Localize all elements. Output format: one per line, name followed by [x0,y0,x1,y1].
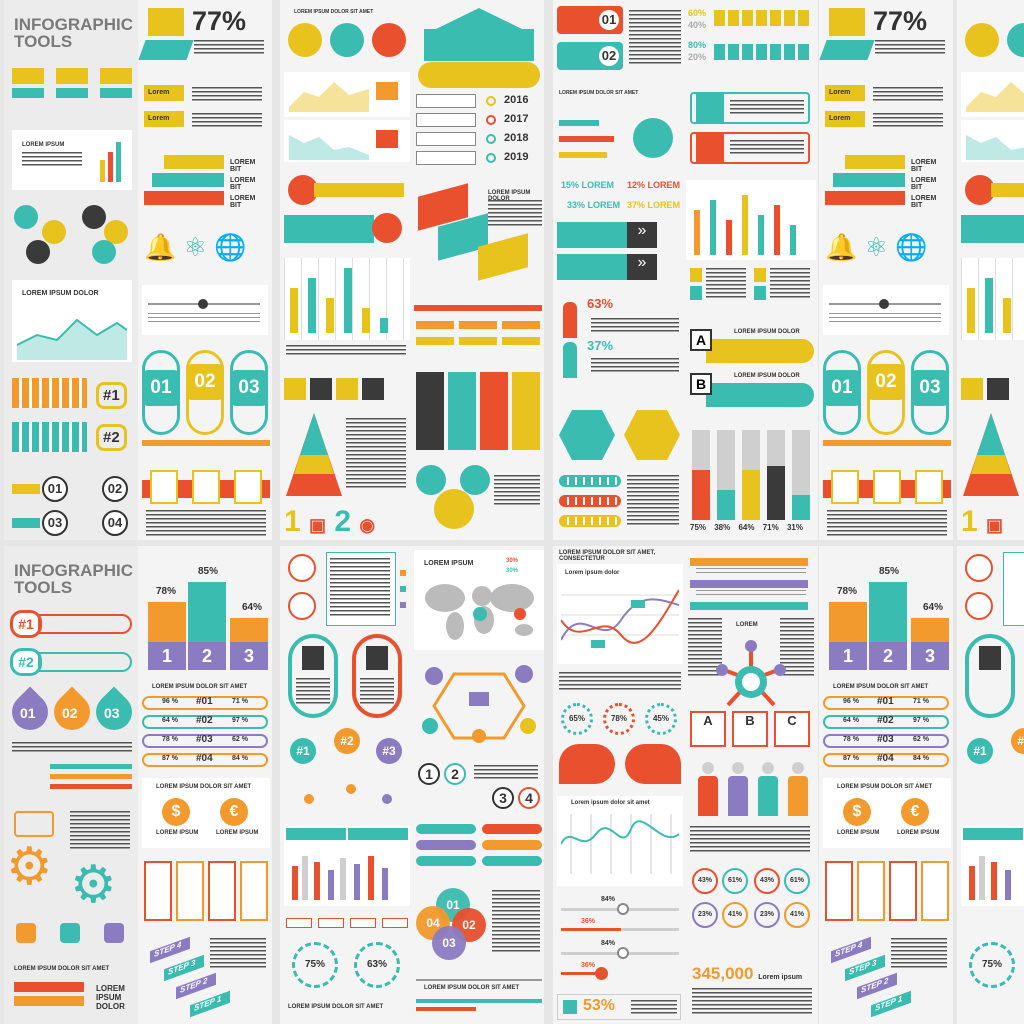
column 7 bottom (repeat of col 2 bottom): 62 % [913,736,929,743]
yellow tags [12,68,132,98]
column 5 top [553,0,687,540]
pct circles: 78% [611,714,627,723]
lorem ipsum heading: LOREM IPSUM DOLOR SIT AMET [152,684,247,690]
red circle and yellow bar [284,175,404,243]
hexagons [559,410,680,460]
#1 #2 labels [10,610,132,676]
#1 #2 #3 nodes [284,728,410,808]
percent circles grid: 41% [728,911,742,918]
column 7 bottom (repeat of col 2 bottom): LOREM IPSUM [837,830,879,836]
years timeline: 2018 [504,132,528,144]
iso steps: LOREM IPSUM DOLOR [488,190,530,202]
step ribbons [142,936,270,1021]
percent circles grid: 43% [760,877,774,884]
#1 #2 labels: #2 [18,654,34,670]
numbers 1 2: 1 ▣ 2 ◉ [284,505,375,538]
pct circles: 65% [569,714,585,723]
progress bars and globe [559,90,673,158]
percent labels: 12% LOREM [627,180,680,190]
drops 01 02 03: 01 [20,705,36,721]
numbers 1 2 3 4: 3 [499,790,507,806]
icon cards [416,372,540,450]
column 1 bottom [4,546,138,1024]
percent circles grid: 61% [728,877,742,884]
sliders: 84% [601,896,615,903]
column 7 top (repeat of col 2): Lorem [829,89,850,96]
column 7 top (repeat of col 2): LOREM BIT [911,159,936,173]
world map: 30% [506,568,518,574]
lorem labels: Lorem [148,89,169,96]
people icon rows: 60% [688,8,706,18]
01 02 header: 02 [602,48,616,63]
line chart: Lorem ipsum dolor [565,570,619,576]
percent labels: 37% LOREM [627,200,680,210]
icon list [690,268,810,300]
percent circles grid: 23% [760,911,774,918]
A B banners: B [696,376,706,392]
people icon rows: 80% [688,40,706,50]
people icon rows: 20% [688,52,706,62]
people figures [686,760,816,820]
3D bars with percentages: 78% [156,586,176,597]
percent labels: 15% LOREM [561,180,614,190]
numbers 1 2 3 4: 1 [425,766,433,782]
sliders [557,896,683,996]
3D bars with percentages: 64% [242,602,262,613]
people icon rows: 40% [688,20,706,30]
percent rows #01-#04: 84 % [232,755,248,762]
step ribbons: STEP 1 [194,994,221,1013]
gears: ⚙ [6,838,53,896]
column 6 bottom [684,546,818,1024]
circles bottom [416,465,540,529]
coins: LOREM IPSUM [156,830,198,836]
sliders: 36% [581,918,595,925]
panel: bar icon: LOREM IPSUM [22,142,64,148]
column 3 top [280,0,414,540]
column 7 top (repeat of col 2): 🔔 ⚛ 🌐 [825,232,928,262]
#1 #2 #3 nodes: #1 [296,744,310,758]
coins: LOREM IPSUM DOLOR SIT AMET [156,784,251,790]
column 7 bottom (repeat of col 2 bottom): LOREM IPSUM [897,830,939,836]
53% [557,994,683,1022]
big ring icons [284,634,410,724]
squares grid #1 #2 [12,378,127,452]
A B banners: LOREM IPSUM DOLOR [734,329,800,335]
column 7 bottom (repeat of col 2 bottom): 64% [923,602,943,613]
column 6 top [684,0,818,540]
big number 77% repeat: 77% [873,6,927,36]
line chart panel: LOREM IPSUM DOLOR [22,290,99,297]
step ribbons: STEP 4 [154,940,181,959]
numbered circles 01-04: 03 [48,515,62,530]
circle steps [14,205,128,264]
numbered circles 01-04 [12,476,128,536]
column 7 top (repeat of col 2): 03 [919,377,941,398]
column 3 bottom [280,546,414,1024]
wave chart [557,796,683,886]
heading: LOREM IPSUM DOLOR SIT AMET, CONSECTETUR [559,550,655,562]
iso box icon [138,8,194,60]
people percentages [563,296,679,378]
top circles [288,9,406,57]
title: infographic tools [14,15,133,51]
numbered circles 01-04: 04 [108,515,122,530]
bar chart bottom [284,826,410,906]
percent rows #01-#04: #03 [196,734,213,745]
A B banners: A [696,332,706,348]
percent rows #01-#04 [142,696,270,776]
arrows [686,550,816,612]
chevron bars [557,222,657,280]
years timeline: 2017 [504,113,528,125]
#1 #2 #3 nodes: #2 [340,734,354,748]
3D bars with percentages: 2 [202,646,212,666]
title: infographic tools: INFOGRAPHIC [14,15,133,34]
wave chart: Lorem ipsum dolor sit amet [571,800,650,806]
ribbons: LOREM BIT [230,177,255,191]
percent rows #01-#04: #01 [196,696,213,707]
A B C boxes [686,711,816,753]
gears [6,811,130,914]
hexagon network [414,656,544,751]
venn circles 01-04: 02 [462,918,476,932]
pills [414,824,544,879]
column 7 bottom (repeat of col 2 bottom): STEP 3 [849,958,876,977]
pyramid [286,413,406,496]
bulb diagram: LOREM [736,622,758,628]
vertical arrow bars [690,430,810,532]
column 7 bottom (repeat of col 2 bottom): 97 % [913,717,929,724]
A B banners [690,328,814,407]
column 4 bottom [410,546,544,1024]
column 7 bottom (repeat of col 2 bottom) [819,546,953,1024]
percent rows #01-#04: 71 % [232,698,248,705]
cart section: DOLOR [96,1002,125,1011]
area chart 2 [284,120,410,162]
cart section: IPSUM [96,993,121,1002]
percent rows #01-#04: 78 % [162,736,178,743]
title: infographic tools: TOOLS [14,32,72,51]
title: infographic tools bottom [14,561,133,597]
lorem labels: Lorem [148,115,169,122]
hex banners [690,92,810,164]
column 7 bottom (repeat of col 2 bottom): 87 % [843,755,859,762]
percent rows #01-#04: 64 % [162,717,178,724]
title: infographic tools bottom: INFOGRAPHIC [14,561,133,580]
bulb diagram [686,618,816,728]
percent rows #01-#04: 96 % [162,698,178,705]
3D bars with percentages: 85% [198,566,218,577]
squares grid #1 #2: #2 [103,429,120,446]
percent rows #01-#04: 87 % [162,755,178,762]
orange label bars [414,305,542,345]
coins: LOREM IPSUM [216,830,258,836]
column 7 bottom (repeat of col 2 bottom): #03 [877,734,894,745]
coins [142,778,270,848]
chevron bars: » [638,254,646,271]
small bars [50,764,132,789]
column 7 bottom (repeat of col 2 bottom): STEP 1 [875,994,902,1013]
column 1 top [4,0,138,540]
bar chart [284,258,410,340]
red speech bubbles [557,744,683,792]
orange blocks [142,440,270,536]
column 7 top (repeat of col 2): Lorem [829,115,850,122]
world map [414,550,544,650]
A B C boxes: A [703,713,713,728]
column 7 bottom (repeat of col 2 bottom): 64 % [843,717,859,724]
venn circles 01-04: 03 [442,936,456,950]
column 7 bottom (repeat of col 2 bottom): #04 [877,753,894,764]
cards row [142,861,270,926]
column 7 bottom (repeat of col 2 bottom): € [911,803,919,820]
numbers 1 2 3 4: 2 [451,766,459,782]
title: infographic tools bottom: TOOLS [14,578,72,597]
percent circles grid: 61% [790,877,804,884]
3D bars with percentages: 3 [244,646,254,666]
percent rows #01-#04: #04 [196,753,213,764]
column 5 bottom [553,546,687,1024]
column 7 bottom (repeat of col 2 bottom): LOREM IPSUM DOLOR SIT AMET [837,784,932,790]
ribbons [144,155,255,209]
cart section: LOREM IPSUM DOLOR SIT AMET [14,966,109,972]
icons with text list [284,550,410,628]
A B C boxes: C [787,713,797,728]
years timeline: 2016 [504,94,528,106]
years timeline: 2019 [504,151,528,163]
percent circles grid [686,868,816,940]
labels row [284,918,410,930]
column 7 top (repeat of col 2) [819,0,953,540]
column 7 bottom (repeat of col 2 bottom): 85% [879,566,899,577]
lorem labels [144,85,262,127]
column 2 top [138,0,272,540]
column 8 top (partial repeat of col 3) [957,0,1024,540]
column 8 bottom (partial repeat of col 3 bottom): 75% [982,959,1002,970]
column 7 top (repeat of col 2): LOREM BIT [911,177,936,191]
01 02 header: 01 [602,12,616,27]
column 8 top (partial repeat of col 3): 1 ▣ [961,505,1003,538]
coins: € [230,803,238,820]
percent rows #01-#04: 97 % [232,717,248,724]
progress pills [559,475,679,527]
numbered hexes 01 02 03: 02 [194,371,216,392]
column 7 top (repeat of col 2): 02 [875,371,897,392]
step ribbons: STEP 2 [180,976,207,995]
bar chart [686,180,816,260]
column 7 bottom (repeat of col 2 bottom): LOREM IPSUM DOLOR SIT AMET [833,684,928,690]
01 02 header [557,6,681,70]
numbered hexes 01 02 03: 03 [238,377,260,398]
column 7 bottom (repeat of col 2 bottom): 96 % [843,698,859,705]
vertical arrow bars: 75% 38% 64% 71% 31% [690,523,803,532]
step ribbons: STEP 3 [168,958,195,977]
world map: LOREM IPSUM [424,560,473,567]
percent rows #01-#04: 62 % [232,736,248,743]
venn circles 01-04 [414,886,544,966]
percent labels [561,180,680,210]
ribbons: LOREM BIT [230,195,255,209]
numbers 1 2 3 4 [414,761,544,811]
column 7 bottom (repeat of col 2 bottom): STEP 2 [861,976,888,995]
#1 #2 labels: #1 [18,616,34,632]
ribbons: LOREM BIT [230,159,255,173]
percent circles grid: 23% [698,911,712,918]
area chart 1 [284,72,410,117]
A B banners: LOREM IPSUM DOLOR [734,373,800,379]
sliders: 84% [601,940,615,947]
percent donuts 75% 63% [284,938,410,998]
years timeline [416,94,528,165]
53%: 53% [583,997,615,1014]
drops 01 02 03 [12,686,132,730]
column 7 bottom (repeat of col 2 bottom): 78% [837,586,857,597]
numbered circles 01-04: 01 [48,481,62,496]
big number 77%: 77% [192,6,246,36]
3D bars with percentages: 1 [162,646,172,666]
squares grid #1 #2: #1 [103,387,120,404]
cart section [14,966,125,1011]
percent circles grid: 43% [698,877,712,884]
timeline bottom [414,971,544,1021]
column 7 bottom (repeat of col 2 bottom): #01 [877,696,894,707]
sliders: 36% [581,962,595,969]
pct circles: 45% [653,714,669,723]
percent circles grid: 41% [790,911,804,918]
chevron bars: » [638,222,646,239]
venn circles 01-04: 04 [426,916,440,930]
percent donuts 75% 63%: 75% [305,959,325,970]
column 8 bottom (partial repeat of col 3 bottom) [957,546,1024,1024]
column 8 bottom (partial repeat of col 3 bottom): #1 [973,744,987,758]
column 7 top (repeat of col 2): LOREM BIT [911,195,936,209]
text columns [559,672,681,692]
345,000: 345,000 Lorem ipsum [692,964,802,983]
top circles: LOREM IPSUM DOLOR SIT AMET [294,9,373,15]
#1 #2 #3 nodes: #3 [382,744,396,758]
progress bars and globe: LOREM IPSUM DOLOR SIT AMET [559,90,638,96]
timeline [142,285,268,335]
cart section: LOREM [96,984,125,993]
pct circles [557,701,683,739]
drops 01 02 03: 02 [62,705,78,721]
small icons [16,923,124,943]
drops 01 02 03: 03 [104,705,120,721]
numbered hexes 01 02 03 [142,350,268,435]
panel: bar icon [12,130,132,190]
people icon rows [688,8,809,62]
column 7 top (repeat of col 2): 01 [831,377,853,398]
percent labels: 33% LOREM [567,200,620,210]
timeline bottom: LOREM IPSUM DOLOR SIT AMET [424,985,519,991]
house header [418,8,540,88]
coins: $ [172,803,180,820]
venn circles 01-04: 01 [446,898,460,912]
line chart [557,564,683,664]
percent rows #01-#04: #02 [196,715,213,726]
column 3 bottom: LOREM IPSUM DOLOR SIT AMET [288,1004,383,1010]
column 7 bottom (repeat of col 2 bottom): 3 [925,646,935,666]
people percentages: 37% [587,338,613,353]
icons squares [284,378,384,400]
iso steps [418,183,542,281]
column 7 bottom (repeat of col 2 bottom): $ [853,803,861,820]
column 4 top [410,0,544,540]
line chart panel [12,280,132,362]
percent donuts 75% 63%: 63% [367,959,387,970]
world map: 30% [506,558,518,564]
column 2 bottom [138,546,272,1024]
numbered circles 01-04: 02 [108,481,122,496]
gears: ⚙ [70,856,117,914]
column 7 bottom (repeat of col 2 bottom): 1 [843,646,853,666]
column 7 bottom (repeat of col 2 bottom): 78 % [843,736,859,743]
3D bars with percentages [142,564,270,674]
people percentages: 63% [587,296,613,311]
icons row: 🔔 ⚛ 🌐 [144,232,247,262]
column 7 bottom (repeat of col 2 bottom): STEP 4 [835,940,862,959]
column 7 bottom (repeat of col 2 bottom): 2 [883,646,893,666]
column 7 bottom (repeat of col 2 bottom): 84 % [913,755,929,762]
numbers 1 2 3 4: 4 [525,790,533,806]
column 7 bottom (repeat of col 2 bottom): 71 % [913,698,929,705]
A B C boxes: B [745,713,755,728]
column 7 bottom (repeat of col 2 bottom): #02 [877,715,894,726]
numbered hexes 01 02 03: 01 [150,377,172,398]
